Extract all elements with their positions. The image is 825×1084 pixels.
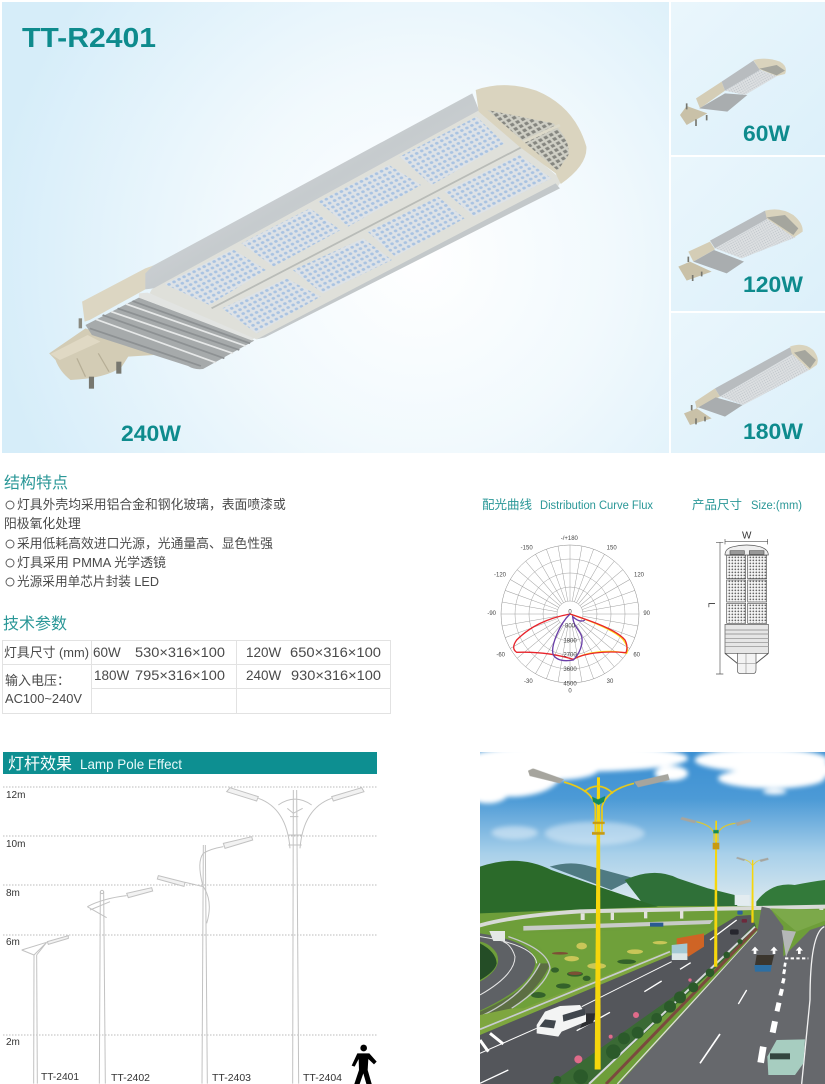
table: technical parameters: 180W xyxy=(94,668,130,683)
section header: lamp pole effect: 灯杆效果 xyxy=(8,755,72,773)
pole TT-2401 xyxy=(22,936,68,1084)
truck: dark xyxy=(754,955,774,972)
truck: orange xyxy=(672,933,704,960)
pole model labels: TT-2402 xyxy=(111,1073,150,1084)
table: technical parameters: 795×316×100 xyxy=(135,668,225,683)
yellow lamp pole: far xyxy=(736,857,769,923)
median planting xyxy=(553,939,743,1084)
polar axis labels: 0 xyxy=(568,610,572,616)
lamp mounting bracket xyxy=(49,318,154,389)
height labels xyxy=(6,790,25,1048)
height labels: 12m xyxy=(6,790,25,801)
table: technical parameters: 灯具尺寸 (mm) xyxy=(4,645,89,660)
ground base xyxy=(480,906,825,1084)
pole model labels: TT-2403 xyxy=(212,1073,251,1084)
wattage label: 240W: 240W xyxy=(121,421,181,446)
pole TT-2402 xyxy=(87,888,153,1084)
heading: distribution curve flux: 配光曲线 xyxy=(482,498,533,512)
yellow lamp pole: near xyxy=(528,768,670,1069)
heading: technical parameters: 技术参数 xyxy=(3,615,67,633)
dimension W: W xyxy=(742,531,752,542)
white van xyxy=(537,1005,586,1037)
feature list: 采用低耗高效进口光源，光通量高、显色性强 xyxy=(17,536,273,551)
wattage label: 180W: 180W xyxy=(743,419,803,444)
bus xyxy=(767,1039,805,1075)
polar axis labels: -120 xyxy=(494,572,507,578)
polar axis labels: 120 xyxy=(634,572,645,578)
polar axis labels: 90 xyxy=(643,611,651,617)
height gridlines xyxy=(3,787,377,1035)
table: technical parameters: AC100~240V xyxy=(5,691,82,706)
title: TT-R2401 xyxy=(22,22,156,53)
table: technical parameters xyxy=(2,640,390,714)
panel: 120W variant xyxy=(671,157,825,311)
polar axis labels: 2700 xyxy=(563,653,577,659)
polar axis labels: 60 xyxy=(633,652,641,658)
polar axis labels: 900 xyxy=(565,624,576,630)
panel: 60W variant xyxy=(671,2,825,155)
main road right xyxy=(619,907,825,1084)
image: 120W lamp xyxy=(678,209,803,281)
curve: yellow xyxy=(570,614,627,659)
road arrows xyxy=(751,947,803,954)
lamp heat sink xyxy=(85,293,256,369)
dimension L xyxy=(707,542,723,674)
lamp outline xyxy=(725,545,768,674)
section header: lamp pole effect xyxy=(3,752,377,774)
table: technical parameters: 930×316×100 xyxy=(291,668,381,683)
roadside grass strip xyxy=(480,950,672,1035)
feature list: 阳极氧化处理 xyxy=(4,516,81,531)
height labels: 6m xyxy=(6,937,20,948)
polar axis labels: 3600 xyxy=(563,667,577,673)
text block: structural features xyxy=(4,474,286,589)
lamp rear housing xyxy=(82,266,153,322)
lamp end cap xyxy=(476,85,586,184)
poles xyxy=(22,788,364,1084)
icon: human scale figure xyxy=(352,1045,377,1084)
height labels: 10m xyxy=(6,839,25,850)
shrub bands xyxy=(564,941,667,969)
service road xyxy=(523,920,713,931)
image: 60W lamp xyxy=(680,59,786,126)
heading: structural features: 结构特点 xyxy=(4,474,68,492)
grass field xyxy=(508,927,720,1008)
guardrail xyxy=(480,952,670,1029)
ramp gore xyxy=(782,930,796,957)
pole model labels xyxy=(41,1072,342,1084)
dimension W xyxy=(725,531,768,544)
feature list: 光源采用单芯片封装 LED xyxy=(17,574,159,589)
yellow lamp pole: middle xyxy=(680,817,751,967)
table: technical parameters: 输入电压： xyxy=(5,673,70,688)
table: technical parameters: 530×316×100 xyxy=(135,645,225,660)
pole model labels: TT-2401 xyxy=(41,1072,79,1083)
distant cars xyxy=(489,911,747,941)
right edge line xyxy=(802,927,824,1084)
lane markings xyxy=(480,920,808,1083)
heading: distribution curve flux xyxy=(482,498,653,512)
feature list: 灯具外壳均采用铝合金和钢化玻璃，表面喷漆或 xyxy=(17,497,286,512)
median flowers xyxy=(574,978,692,1063)
pole TT-2403 xyxy=(157,837,253,1084)
heading: product size: 产品尺寸 xyxy=(692,498,742,512)
wattage label: 120W: 120W xyxy=(743,272,803,297)
heading: product size: Size:(mm) xyxy=(751,500,802,512)
height labels: 2m xyxy=(6,1037,20,1048)
polar axis labels: 30 xyxy=(607,679,614,685)
polar axis labels: -150 xyxy=(521,546,533,552)
height labels: 8m xyxy=(6,888,20,899)
polar axis labels: 150 xyxy=(607,546,617,552)
table: technical parameters: 240W xyxy=(246,668,282,683)
polar axis labels: 0 xyxy=(568,689,572,695)
curve: purple xyxy=(553,614,585,661)
main road left xyxy=(480,915,755,1084)
heading: product size xyxy=(692,498,802,512)
hills xyxy=(480,861,825,913)
polar axis labels: -/+180 xyxy=(561,536,579,542)
section header: lamp pole effect: Lamp Pole Effect xyxy=(80,756,182,772)
photo: highway with yellow lamp poles xyxy=(461,745,825,1084)
lamp aluminium side rail xyxy=(145,93,480,289)
wattage label: 60W: 60W xyxy=(743,121,790,146)
lamp LED bay xyxy=(150,110,562,339)
polar axis labels: -30 xyxy=(524,679,533,685)
image: 180W lamp xyxy=(684,345,818,425)
pole TT-2404 xyxy=(227,788,364,1084)
curve: red xyxy=(514,614,627,659)
chart: lamp pole height comparison xyxy=(3,787,377,1084)
polar axis labels: 1800 xyxy=(563,638,577,644)
central median xyxy=(550,923,757,1084)
overpass xyxy=(480,905,825,927)
panel: main product hero xyxy=(2,2,669,453)
van shadow xyxy=(580,1013,595,1028)
polar axis labels: -60 xyxy=(496,652,506,658)
polar axis labels: 4500 xyxy=(563,681,577,687)
polar axis labels xyxy=(487,536,651,695)
image: 240W street lamp xyxy=(49,85,586,389)
chart: polar light distribution xyxy=(473,517,667,711)
panel: 180W variant xyxy=(671,313,825,453)
feature list xyxy=(4,497,286,589)
highway scene foreground xyxy=(480,905,825,1084)
diagram: product dimensions xyxy=(707,531,768,674)
polar axis labels: -90 xyxy=(487,611,497,617)
table: technical parameters: 650×316×100 xyxy=(290,645,381,660)
dimension L: L xyxy=(707,602,717,608)
left curved ramp xyxy=(480,933,551,1015)
pole model labels: TT-2404 xyxy=(303,1073,342,1084)
sky and clouds xyxy=(461,745,825,909)
right grass verge xyxy=(770,908,825,932)
feature list: 灯具采用 PMMA 光学透镜 xyxy=(17,555,166,570)
table: technical parameters: 120W xyxy=(246,645,282,660)
table: technical parameters: 60W xyxy=(93,645,121,660)
heading: distribution curve flux: Distribution Curve Flux xyxy=(540,500,653,512)
